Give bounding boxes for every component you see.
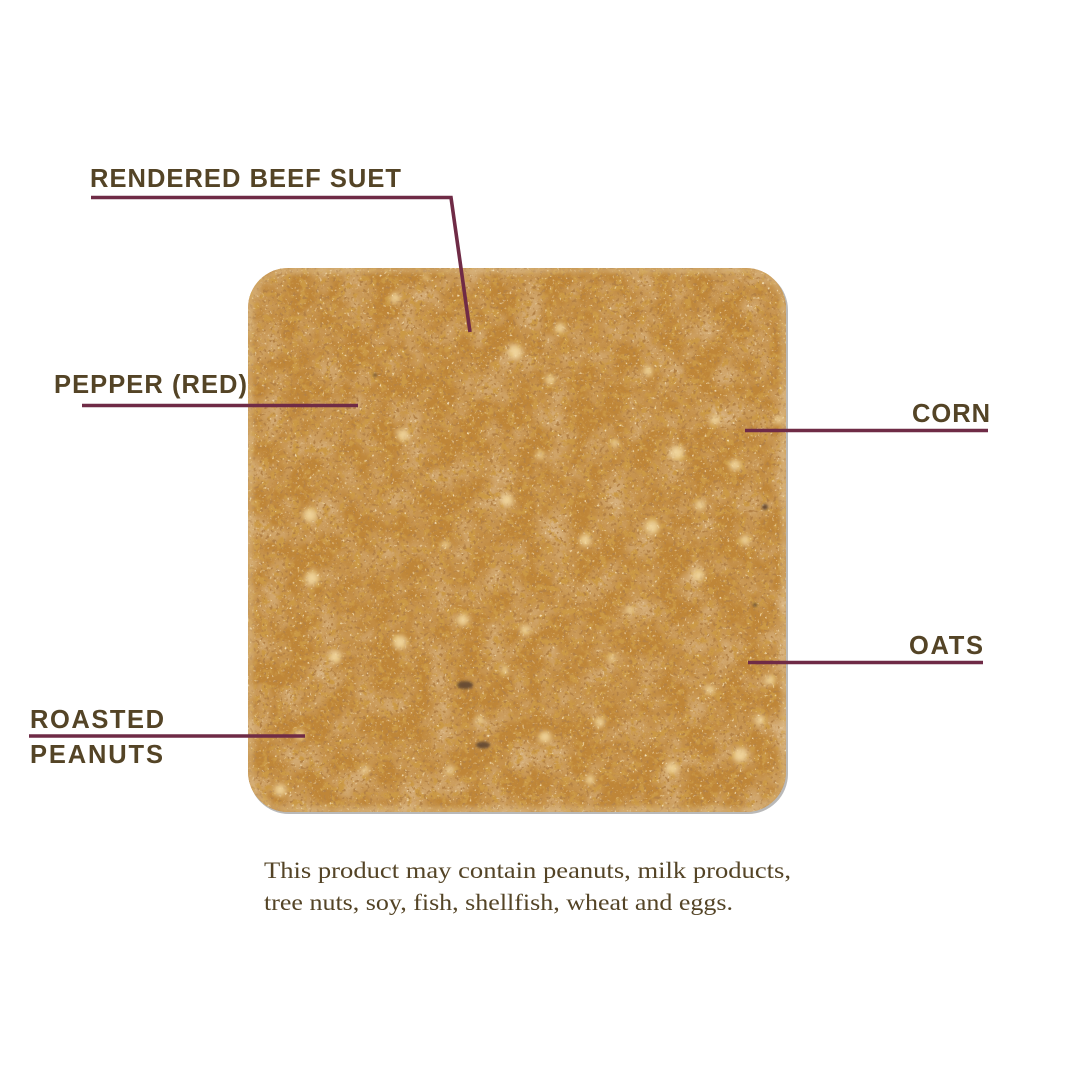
- leader line: corn: [745, 429, 988, 432]
- label: oats: OATS: [909, 632, 983, 660]
- leader line: oats: [748, 661, 983, 664]
- label: roasted peanuts: [29, 706, 305, 769]
- allergen note: This product may contain peanuts, milk products,: [264, 858, 791, 883]
- label: rendered beef suet: RENDERED BEEF SUET: [90, 165, 401, 193]
- label: corn: CORN: [912, 400, 990, 428]
- label: rendered beef suet: [90, 165, 470, 332]
- label: roasted peanuts: ROASTED: [30, 706, 164, 734]
- leader line: roasted peanuts: [29, 734, 305, 738]
- leader line: pepper (red): [82, 404, 358, 407]
- leader line: rendered beef suet: [91, 198, 470, 332]
- allergen note: [264, 858, 791, 915]
- product: square suet cake: [248, 268, 788, 814]
- allergen note: tree nuts, soy, fish, shellfish, wheat and eggs.: [264, 890, 733, 915]
- label: pepper (red): PEPPER (RED): [54, 371, 247, 399]
- label: roasted peanuts: PEANUTS: [30, 741, 163, 769]
